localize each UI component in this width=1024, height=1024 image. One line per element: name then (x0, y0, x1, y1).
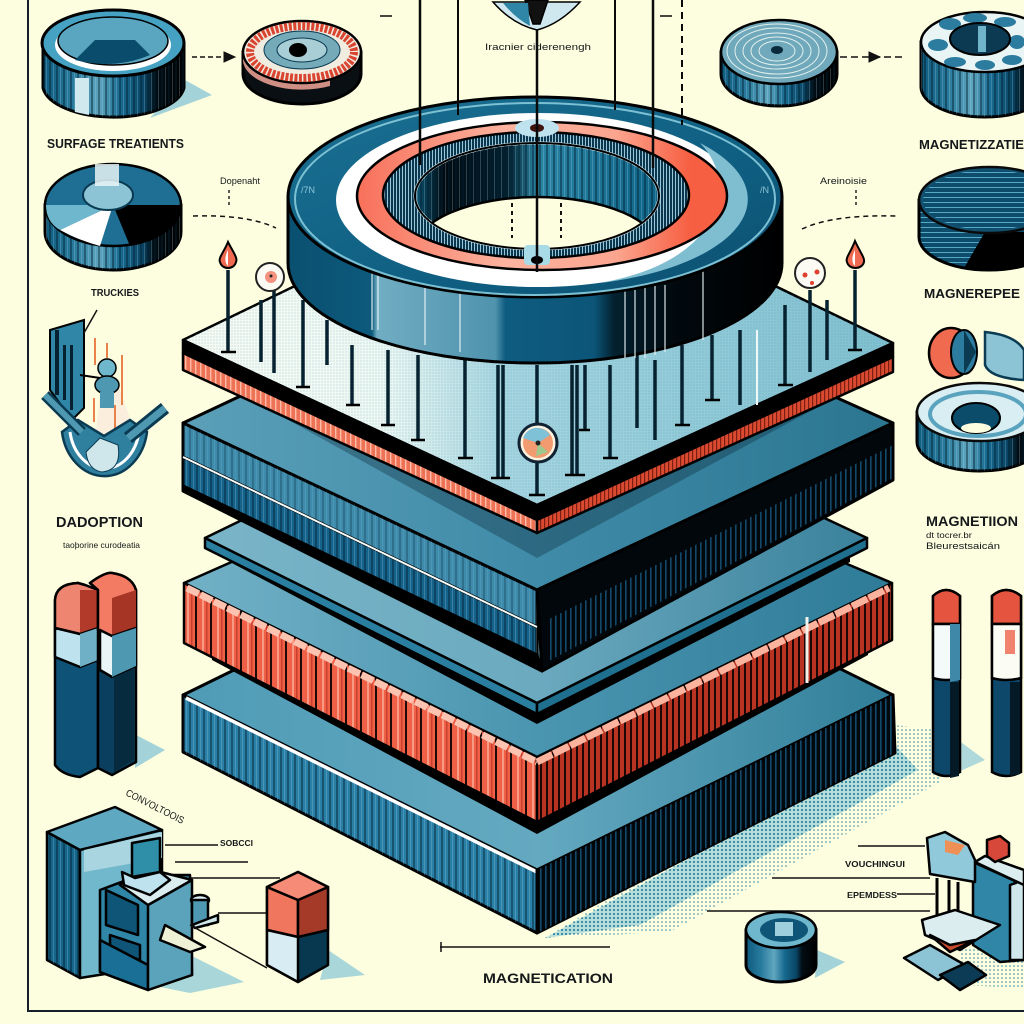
icon: camo magnet (921, 12, 1024, 117)
pin bases (221, 350, 862, 495)
hole dashed guides (512, 203, 561, 238)
plate edge highlight (756, 330, 758, 405)
icon: red and white block (267, 872, 365, 982)
icon: glass segment (985, 332, 1024, 380)
ring tick labels: /7N (301, 185, 315, 195)
icon: top-left ring (42, 10, 212, 118)
icon: cut red and blue cylinders (929, 328, 977, 378)
sublabel: magnetiion: dt tocrer.br (926, 530, 972, 540)
label: epemdess: EPEMDESS (847, 890, 897, 900)
icon: bearing ring (917, 383, 1024, 471)
central magnet ring (288, 97, 782, 363)
hole opening (432, 196, 642, 248)
red band (357, 122, 727, 270)
icon: right inspection ball (795, 258, 825, 288)
top centre icon (493, 0, 580, 30)
drop shadow of central stack (545, 725, 940, 938)
arrow: coil disc to magnet (840, 52, 905, 62)
icon: right flame (847, 241, 864, 268)
heading: magnetication: MAGNETICATION (483, 970, 613, 986)
stack layer: red coil band (184, 430, 892, 822)
callout lines: left machine (165, 845, 280, 968)
label: sobcci: SOBCCI (220, 838, 253, 848)
icon: right press machine (904, 832, 1024, 990)
icon: right columns (933, 590, 1021, 778)
icon: left flame (220, 242, 236, 268)
icon: concentric coil disc (721, 20, 837, 106)
arrow: ring to disc (192, 52, 235, 62)
heading: surface treatments: SURFAGE TREATIENTS (47, 136, 184, 151)
ring tick labels: /N (760, 185, 769, 195)
sublabel: dadoption: taoþorine curodeatia (63, 540, 140, 550)
icon: small cup ring (746, 912, 845, 982)
shadow under red band (212, 640, 868, 834)
label: magnerepee: MAGNEREPEE (924, 286, 1020, 301)
hatched band (383, 132, 689, 258)
top centre caption: Iracnier ciderenengh (485, 42, 591, 53)
curved arrow: right (802, 216, 896, 229)
icon: left inspection ball (256, 263, 284, 291)
ring tick labels (301, 185, 769, 195)
wall stripes (417, 144, 656, 222)
hole outline (415, 143, 659, 249)
icon: textured dark disc (919, 167, 1024, 275)
stack layer: bottom block (183, 520, 895, 933)
icon: left paired columns (55, 573, 165, 777)
top leader lines (380, 0, 682, 272)
stand line for bottom caption (440, 942, 610, 952)
label: dopenaht: Dopenaht (220, 176, 260, 186)
curved arrow: left (193, 216, 276, 228)
heading: magnetization: MAGNETIZZATIE (919, 137, 1024, 152)
label: dopenaht (220, 176, 260, 207)
band shading (600, 143, 748, 283)
icon: faceted disc (45, 164, 181, 270)
ring side wall (288, 197, 782, 363)
icon: mixing bowl assembly (45, 310, 165, 476)
label: areinoisie (820, 176, 867, 208)
top marker (515, 119, 559, 137)
white band (336, 113, 740, 287)
shadow under thin plate (230, 548, 850, 724)
icon: left machine (47, 807, 244, 993)
ring top face (288, 97, 782, 297)
inner wall (415, 143, 659, 249)
sublabel: magnetiion: Bleurestsaicán (926, 541, 1000, 551)
label: convoltoois: CONVOLTOOIS (124, 788, 186, 827)
sublabel: magnetiion (926, 530, 1000, 551)
shadow under top plate (245, 396, 835, 558)
ring top rim highlight (295, 103, 775, 295)
label: truckies: TRUCKIES (91, 288, 139, 299)
pins (228, 270, 855, 495)
stack layer: thin plate (205, 380, 867, 714)
icon: centre inspection ball (519, 424, 557, 462)
icon: red-banded disc (243, 21, 361, 104)
stack layer: top plate with pins (183, 170, 893, 533)
ring side highlights (372, 250, 703, 358)
stack layer: dark plate (183, 260, 893, 671)
shadow under dark plate (255, 522, 820, 672)
label: areinoisie: Areinoisie (820, 176, 867, 186)
label: dadoption: DADOPTION (56, 514, 143, 531)
bottom marker (524, 245, 550, 265)
label: vouchingui: VOUCHINGUI (845, 859, 905, 869)
label: magnetiion: MAGNETIION (926, 513, 1018, 529)
callout lines: right machine (707, 846, 935, 911)
